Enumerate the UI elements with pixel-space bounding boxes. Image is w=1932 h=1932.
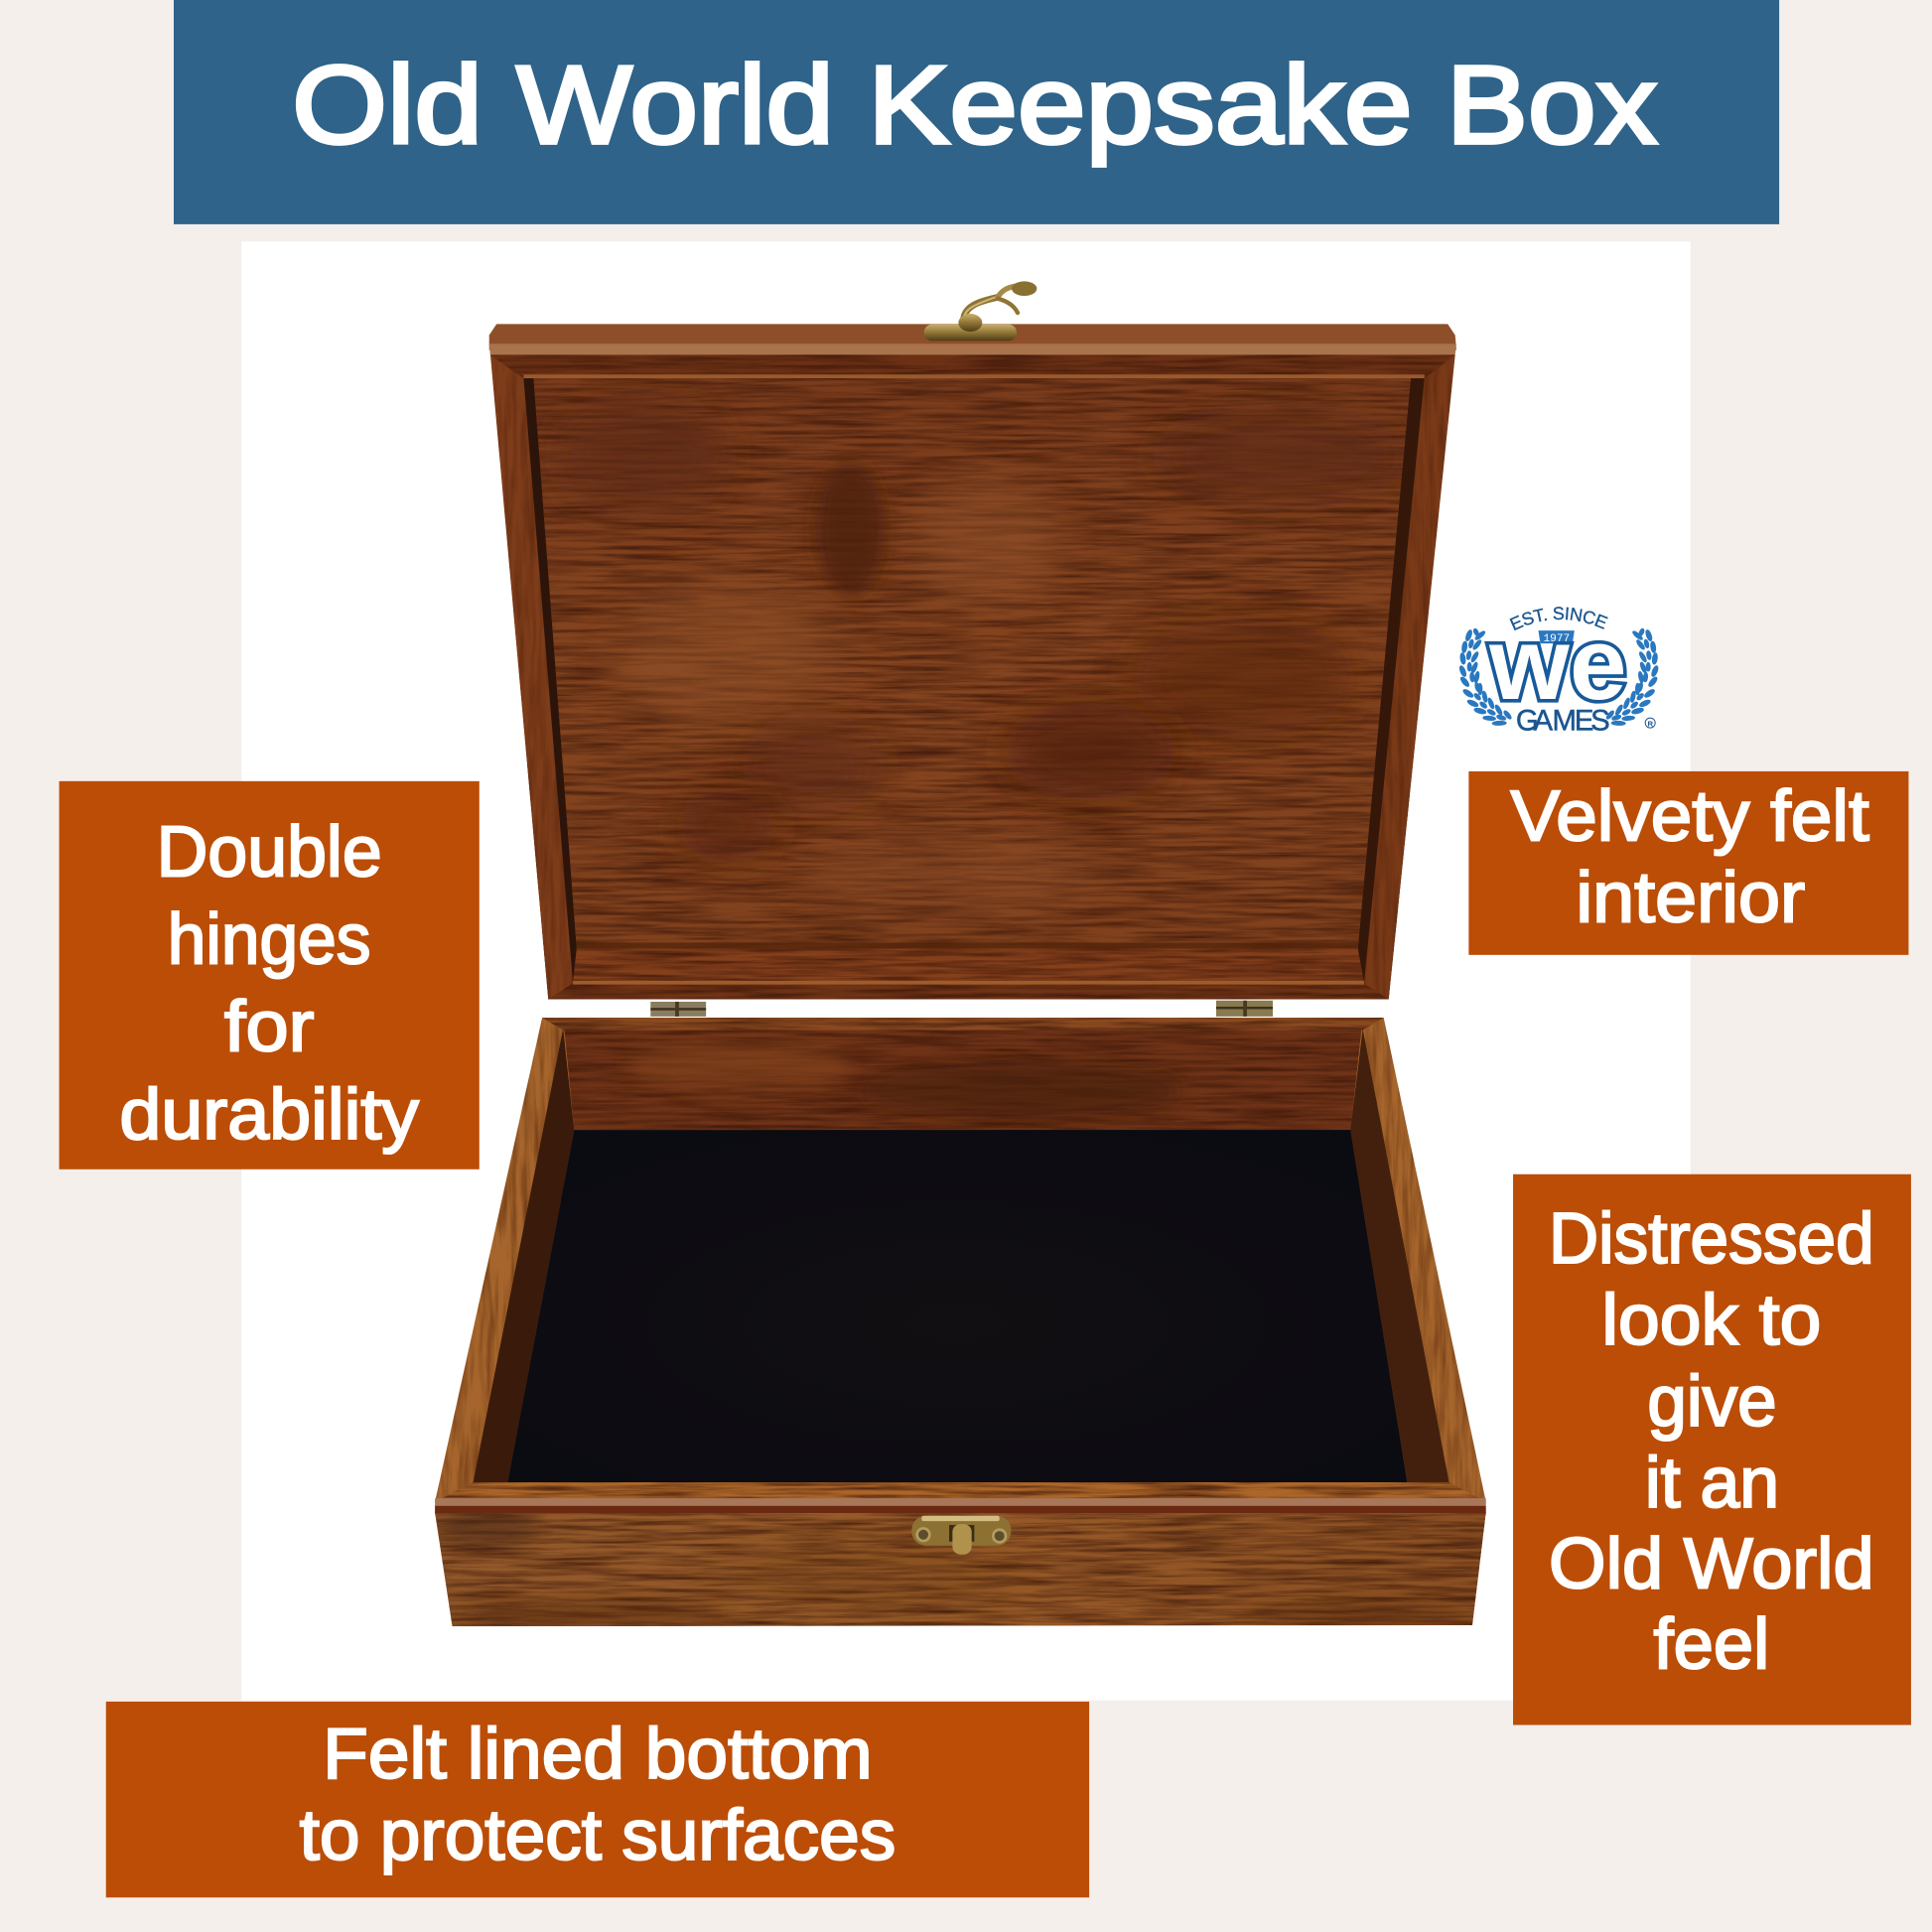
callout: distressed look: look to	[1601, 1281, 1821, 1360]
title banner	[174, 0, 1779, 224]
front rim top	[435, 1482, 1486, 1502]
callout: double hinges: Double	[157, 812, 382, 892]
callout: velvety felt	[1468, 771, 1908, 955]
left inner wall	[474, 1029, 574, 1482]
right hinge	[1216, 1001, 1273, 1017]
callout: distressed look: give	[1647, 1362, 1777, 1442]
callout: double hinges: for	[224, 988, 314, 1067]
callout: velvety felt: Velvety felt	[1511, 776, 1869, 856]
WE Games logo: EST. SINCE	[1509, 607, 1608, 631]
callout: felt lined bottom	[106, 1702, 1089, 1897]
WE Games logo: GAMES	[1516, 704, 1610, 737]
black felt lining	[507, 1130, 1407, 1482]
callout: distressed look: Old World	[1549, 1525, 1874, 1604]
callout: double hinges: durability	[119, 1075, 419, 1155]
callout: velvety felt: interior	[1576, 858, 1805, 937]
WE Games logo: R	[1648, 719, 1654, 728]
callout: distressed look: it an	[1645, 1444, 1779, 1523]
right inner wall	[1350, 1029, 1449, 1482]
WE Games logo: we	[1488, 606, 1627, 721]
white product photo panel	[241, 241, 1691, 1701]
front face	[435, 1508, 1486, 1631]
callout: distressed look: Distressed	[1549, 1199, 1874, 1279]
box base	[435, 1018, 1486, 1631]
keepsake box photo	[435, 281, 1486, 1631]
title banner: Old World Keepsake Box	[292, 43, 1657, 167]
left hinge	[650, 1002, 706, 1017]
lid hook clasp	[924, 281, 1036, 341]
front latch	[911, 1516, 1011, 1555]
callout: felt lined bottom: to protect surfaces	[300, 1796, 896, 1875]
WE Games logo	[1459, 606, 1658, 737]
callout: double hinges	[60, 781, 480, 1170]
WE Games logo: 1977	[1543, 633, 1570, 645]
box lid	[489, 324, 1456, 1000]
callout: distressed look	[1513, 1174, 1911, 1725]
callout: felt lined bottom: Felt lined bottom	[323, 1715, 873, 1794]
lid inner wood panel	[533, 378, 1411, 949]
callout: distressed look: feel	[1654, 1604, 1769, 1684]
back inner wall	[564, 1031, 1361, 1131]
callout: double hinges: hinges	[168, 900, 371, 980]
